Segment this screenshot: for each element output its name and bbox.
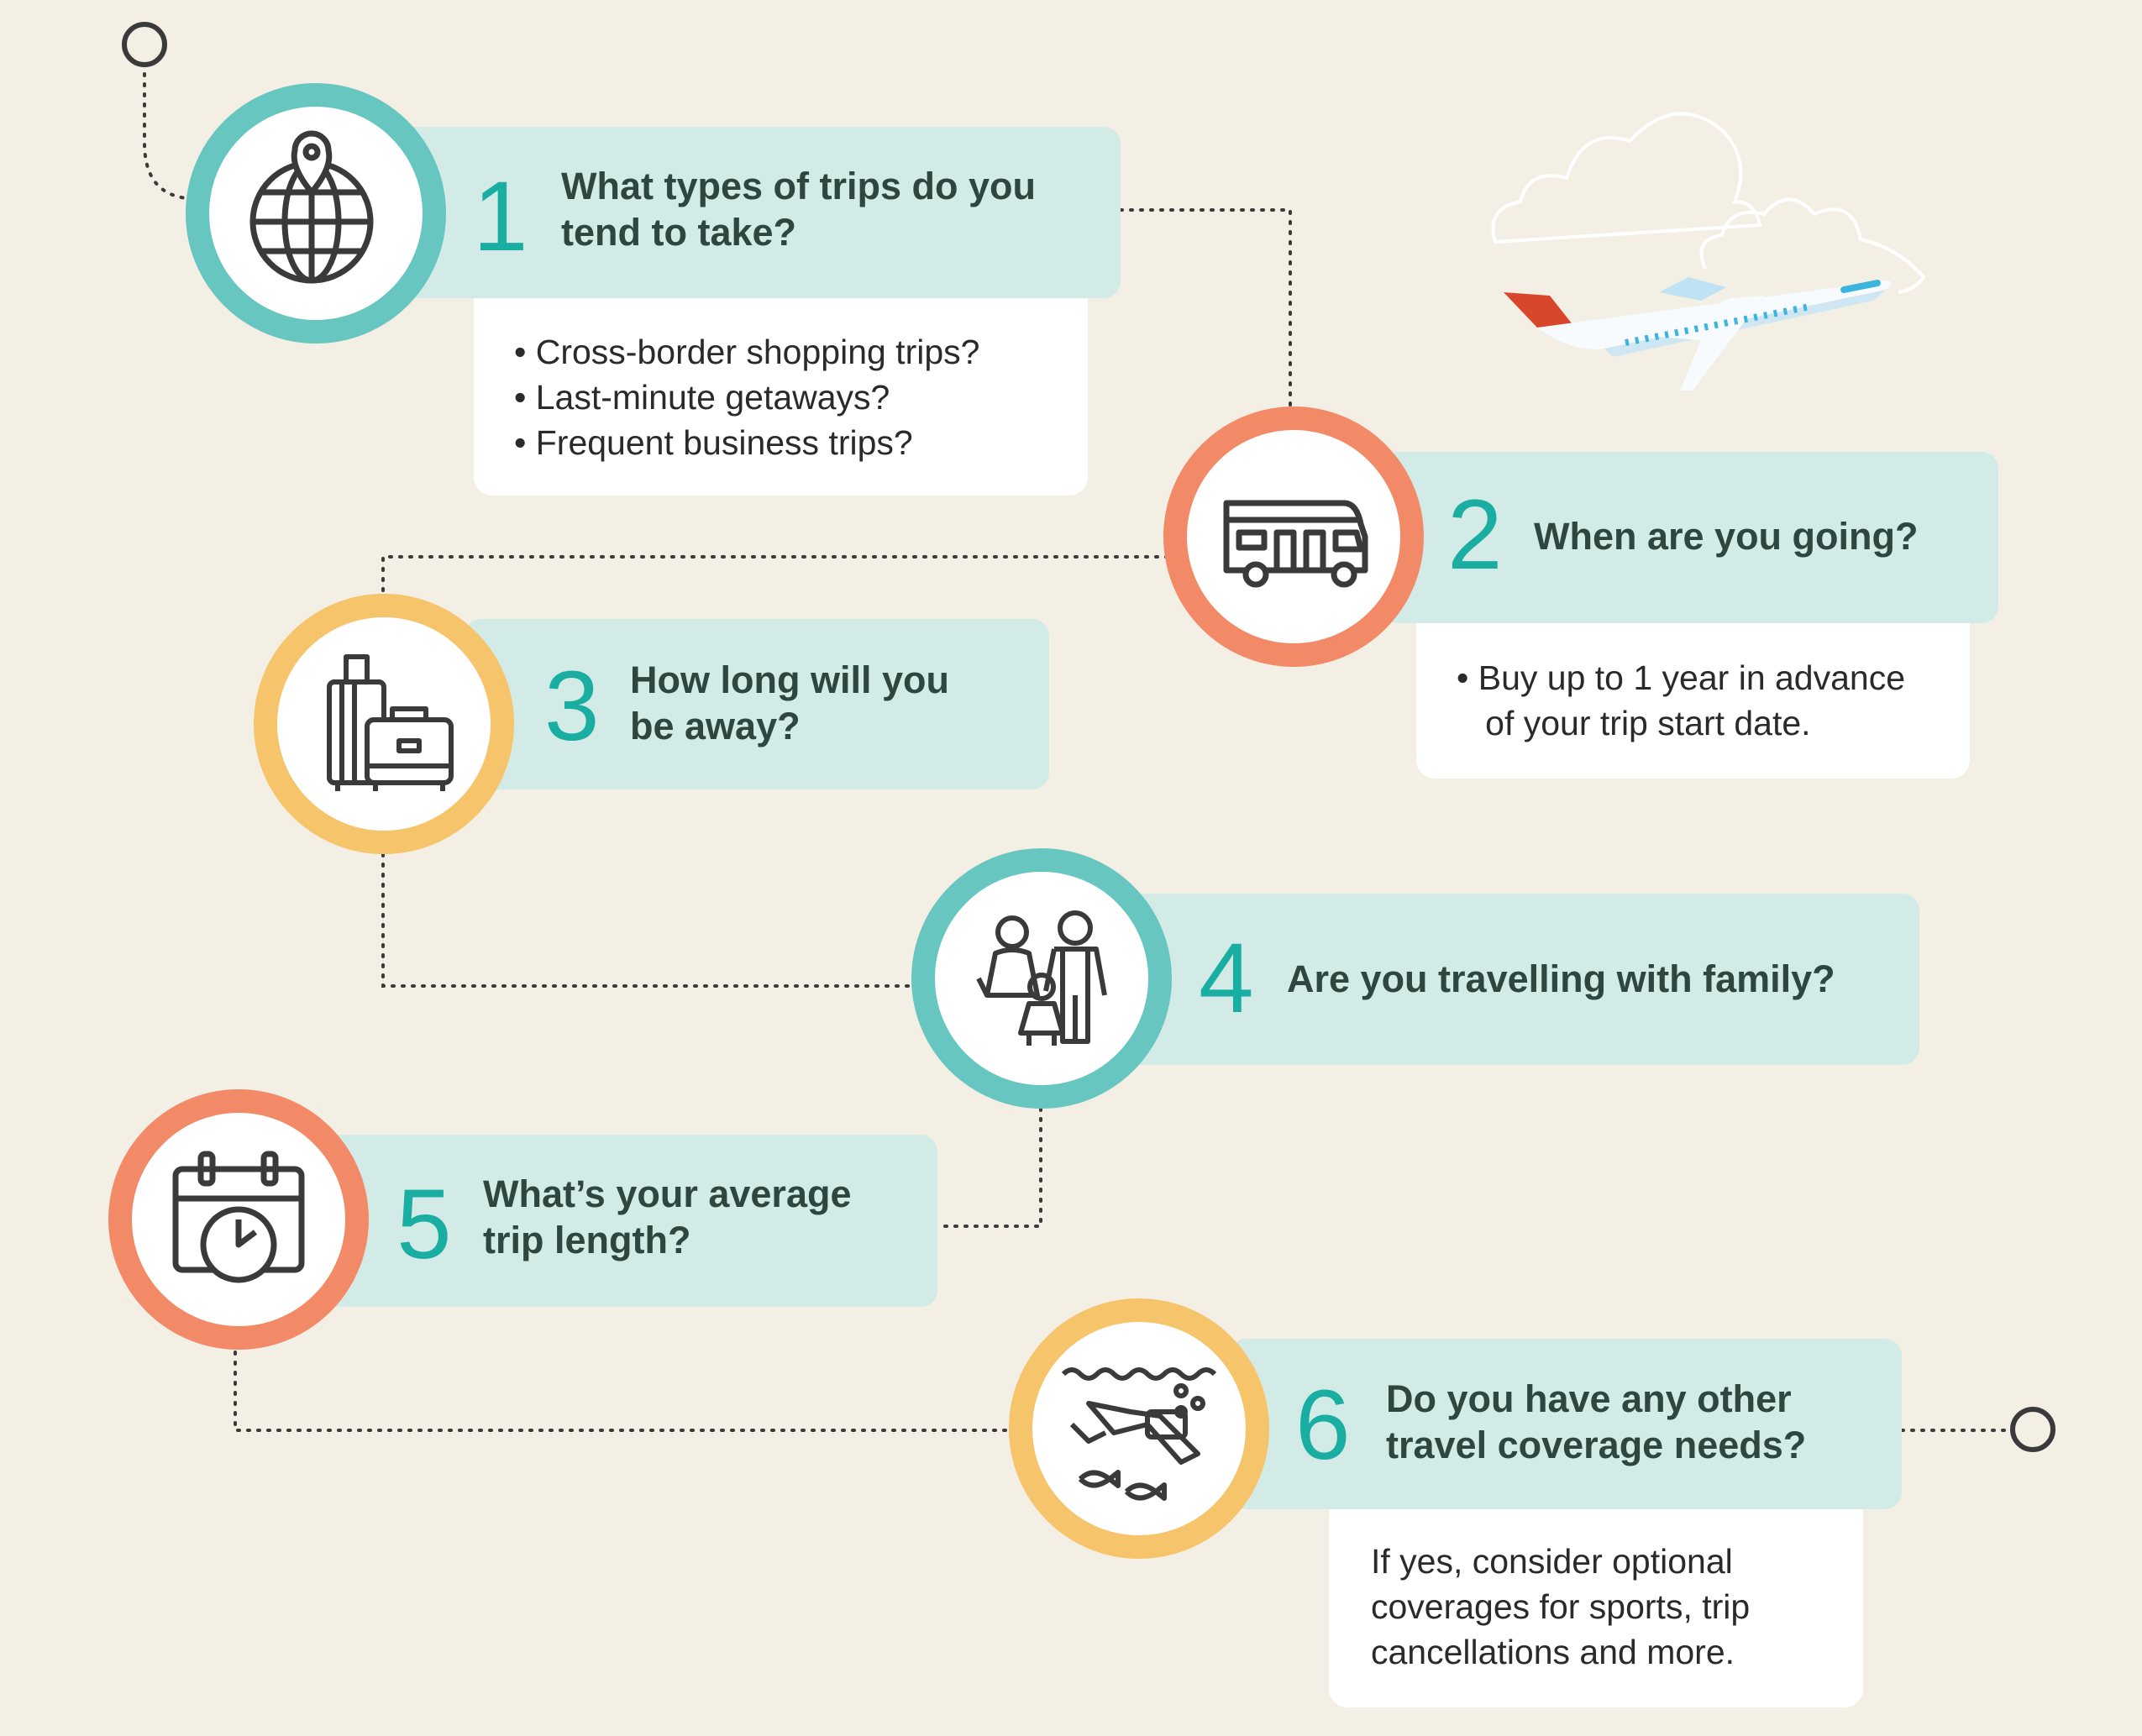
step 1: white detail box: [474, 277, 1088, 496]
circle 3: luggage icon: [254, 594, 514, 854]
step 6: white detail box: [1329, 1495, 1863, 1707]
title 2: When are you going?: [1534, 515, 1919, 558]
title 1: tend to take?: [561, 211, 796, 254]
step 6 text: cancellations and more.: [1371, 1633, 1735, 1671]
number 1: 1: [473, 161, 528, 272]
step 3 panel: [465, 619, 1049, 789]
title 5: [483, 1172, 852, 1261]
number 2: 2: [1447, 480, 1503, 590]
title 6: travel coverage needs?: [1386, 1424, 1806, 1466]
step 1 bullets: • Cross-border shopping trips?: [514, 333, 979, 371]
circle 2: RV icon: [1163, 406, 1424, 667]
title 3: be away?: [630, 705, 801, 747]
title 5: trip length?: [483, 1219, 690, 1261]
number 6: 6: [1295, 1370, 1351, 1481]
number 4: 4: [1199, 923, 1254, 1034]
step 2: white detail box: [1416, 605, 1970, 779]
circle 4: family icon: [911, 848, 1172, 1109]
title 1: What types of trips do you: [561, 165, 1036, 207]
step 1 bullets: [514, 333, 979, 462]
step 2 panel: [1380, 452, 1998, 623]
step 2 bullet: [1457, 658, 1905, 742]
end marker: [2010, 1407, 2055, 1452]
title 5: What’s your average: [483, 1172, 852, 1215]
step 6 text: coverages for sports, trip: [1371, 1587, 1750, 1626]
circle 6: diver icon: [1009, 1298, 1269, 1559]
title 4: Are you travelling with family?: [1287, 957, 1835, 1000]
step 5 panel: [321, 1135, 937, 1307]
start marker: [122, 22, 167, 67]
title 3: [630, 658, 949, 747]
step 2 bullet: of your trip start date.: [1485, 704, 1811, 742]
step 4 panel: [1121, 894, 1919, 1065]
step 6 panel: [1230, 1339, 1902, 1509]
step 6 text: [1371, 1542, 1750, 1671]
number 5: 5: [396, 1169, 452, 1280]
circle 1: globe icon: [186, 83, 446, 344]
step 6 text: If yes, consider optional: [1371, 1542, 1733, 1581]
step 1 bullets: • Last-minute getaways?: [514, 378, 890, 417]
title 6: [1386, 1377, 1806, 1466]
step 2 bullet: • Buy up to 1 year in advance: [1457, 658, 1905, 697]
title 3: How long will you: [630, 658, 949, 701]
step 1 bullets: • Frequent business trips?: [514, 423, 913, 462]
title 1: [561, 165, 1036, 254]
illustration: plane and clouds: [1492, 112, 1925, 391]
title 6: Do you have any other: [1386, 1377, 1792, 1420]
number 3: 3: [544, 651, 600, 762]
circle 5: calendar clock icon: [108, 1089, 369, 1350]
step 1 panel: [395, 127, 1121, 298]
